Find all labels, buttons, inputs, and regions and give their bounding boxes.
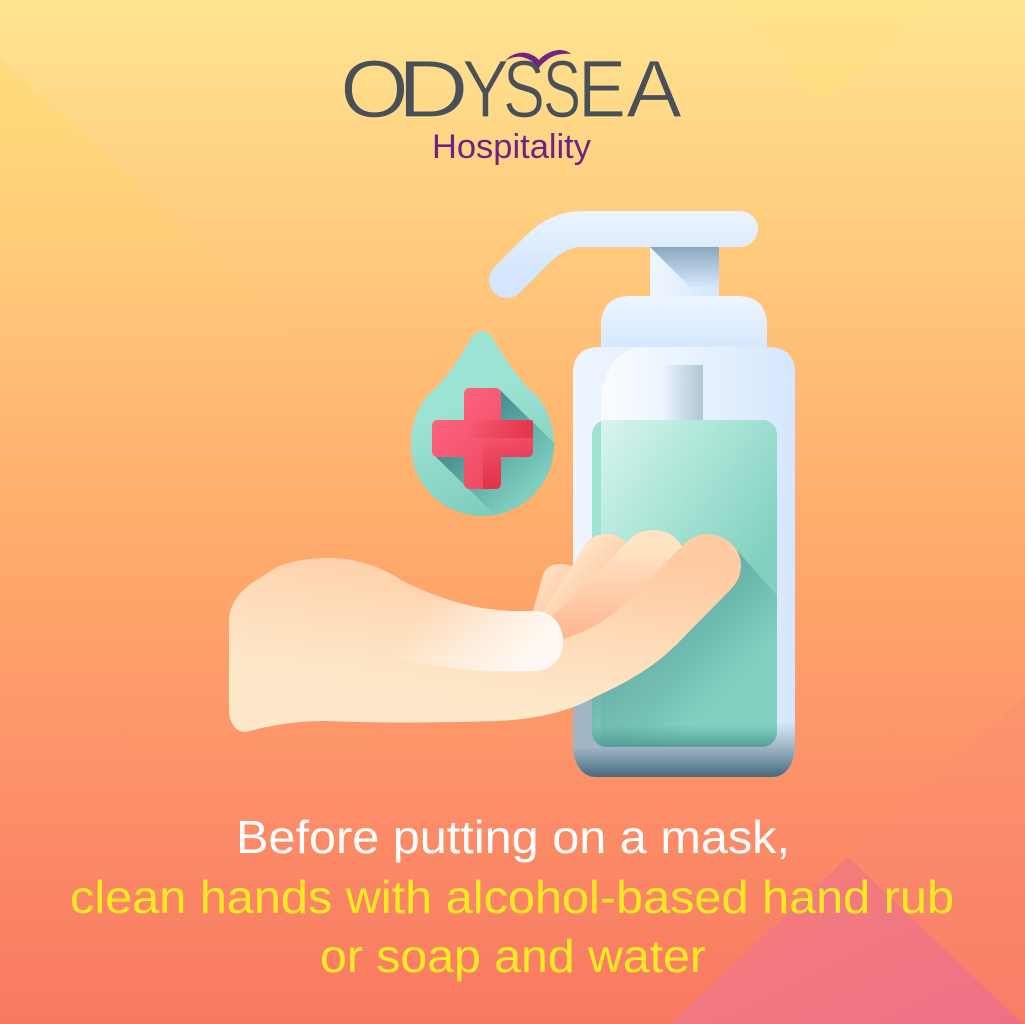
logo bird mark [505, 50, 571, 68]
soap dispenser [507, 229, 795, 777]
logo wordmark: D [397, 44, 469, 135]
background triangle: left [0, 58, 300, 338]
caption line 3: or soap and water [320, 930, 706, 982]
liquid bottom shading [592, 728, 777, 747]
logo wordmark: A [626, 44, 682, 135]
middle finger [552, 530, 682, 640]
bottle neck shadow [662, 365, 703, 421]
caption line 2: clean hands with alcohol-based hand rub [70, 871, 954, 923]
background triangle: bottom right pink [670, 857, 1022, 1024]
cross long shadow [436, 390, 556, 520]
background triangle: top right [722, 0, 935, 103]
drop [411, 331, 554, 516]
liquid [592, 420, 777, 747]
pump stem [650, 240, 719, 300]
bottle body [573, 347, 795, 777]
sanitizer drop with cross [411, 331, 556, 520]
ring finger [543, 534, 626, 625]
logo wordmark: E [578, 44, 626, 135]
logo wordmark: O [340, 44, 409, 135]
red cross [432, 388, 533, 489]
caption [70, 811, 954, 982]
logo subtitle: Hospitality [432, 128, 591, 166]
logo wordmark: Y [462, 44, 509, 135]
logo wordmark: S [543, 44, 581, 135]
forearm, palm and index finger [229, 534, 741, 732]
pump cap [601, 296, 767, 350]
bottle left strip shadow [573, 698, 598, 750]
logo [340, 44, 682, 166]
pump nozzle [507, 229, 740, 280]
bottle base shading [573, 722, 795, 777]
bottle inner highlight [601, 347, 795, 777]
hand shadow on liquid [592, 550, 777, 745]
caption line 1: Before putting on a mask, [236, 811, 790, 863]
background triangle: right [848, 695, 1025, 1024]
little finger [533, 564, 585, 615]
logo wordmark: S [503, 44, 545, 135]
thumb highlight [378, 570, 563, 671]
hand [229, 530, 741, 732]
